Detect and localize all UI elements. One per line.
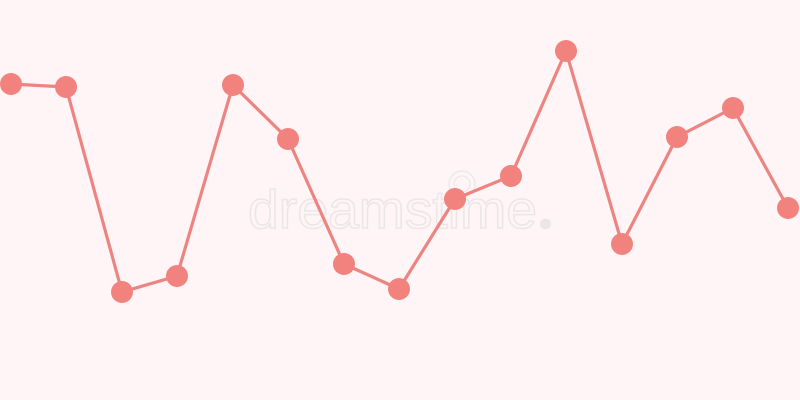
data line (11, 51, 788, 292)
data points (0, 40, 799, 303)
watermark: dreamstime (248, 180, 537, 240)
